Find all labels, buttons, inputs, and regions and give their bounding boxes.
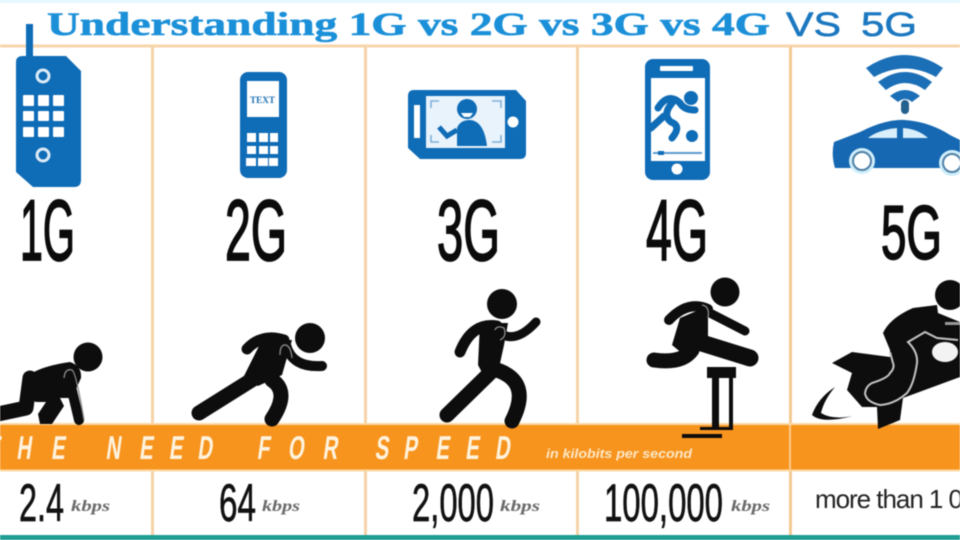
figure: 4G hurdling <box>654 278 750 438</box>
generation labels: 4G <box>646 183 708 279</box>
icon: 2G text phone: TEXT <box>250 95 275 105</box>
icon: 4G smartphone <box>645 59 710 180</box>
figure: 2G starting <box>199 323 325 419</box>
icon: 3G video phone <box>408 90 526 159</box>
3G speed: kbps <box>500 498 540 515</box>
icon: 1G brick phone <box>16 24 81 187</box>
title: VS <box>786 6 841 44</box>
band note: in kilobits per second <box>546 446 693 461</box>
4G speed: 100,000 <box>604 474 723 533</box>
icon: 2G text phone <box>240 72 287 178</box>
generation labels <box>20 183 942 279</box>
title: Understanding 1G vs 2G vs 3G vs 4G <box>47 7 770 43</box>
icon: 5G connected car <box>833 55 960 176</box>
figure: 5G motorcycle rider <box>812 280 960 429</box>
2G speed: 64 <box>219 474 256 533</box>
1G speed: 2.4 <box>19 474 64 533</box>
hurdle <box>682 367 736 438</box>
band heading: THENEEDFORSPEED <box>0 429 514 466</box>
speed band <box>0 423 960 472</box>
speed values <box>19 474 960 533</box>
5G speed: more than 1 0 <box>815 484 960 514</box>
generation labels: 3G <box>437 183 500 279</box>
1G speed: kbps <box>71 498 110 515</box>
footer strip <box>0 535 960 540</box>
wifi signal <box>866 55 943 114</box>
figure: 1G crawling <box>0 342 102 424</box>
generation labels: 1G <box>20 183 75 279</box>
title: 5G <box>861 6 917 44</box>
car <box>833 120 960 176</box>
2G speed: kbps <box>262 498 300 515</box>
4G speed: kbps <box>731 498 770 515</box>
title <box>47 6 917 44</box>
generation labels: 2G <box>225 183 287 279</box>
3G speed: 2,000 <box>412 474 494 533</box>
figure: 3G running <box>447 289 536 421</box>
